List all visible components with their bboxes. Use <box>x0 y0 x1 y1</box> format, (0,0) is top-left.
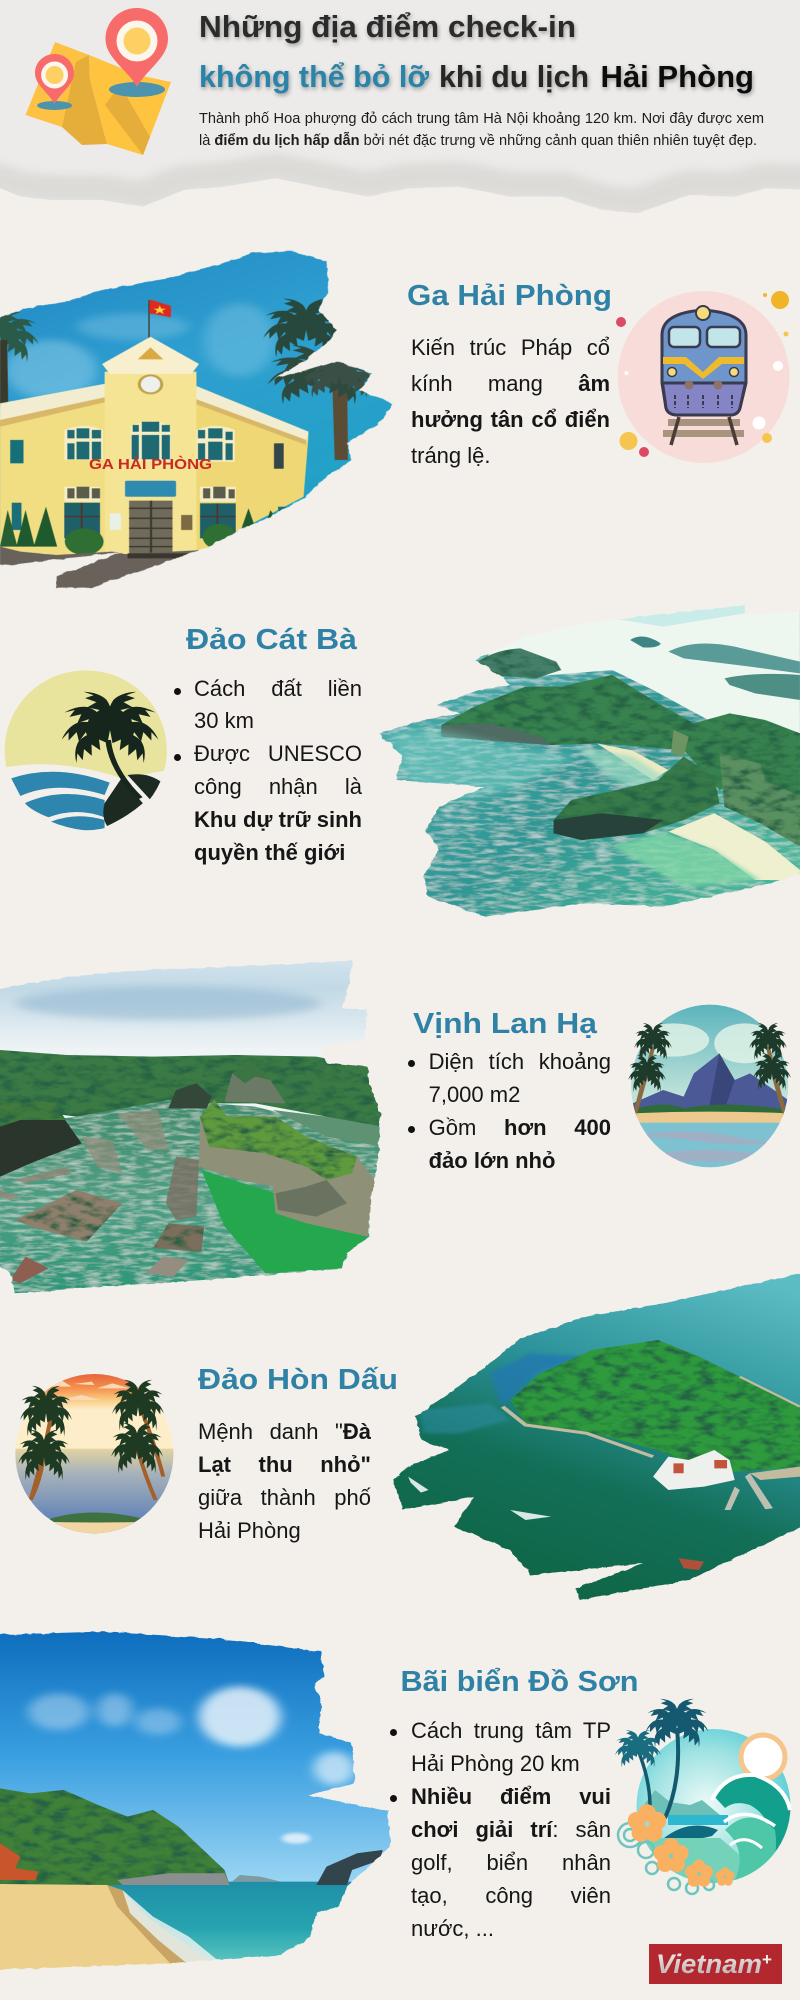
title <box>199 9 754 94</box>
title: Những địa điểm check-in <box>199 9 576 44</box>
text: Đảo Cát Bà bullets: Cách đất liền <box>194 676 362 701</box>
photo: Ga Hải Phòng station <box>0 243 403 593</box>
text: Đảo Cát Bà bullets: Được UNESCO <box>194 741 362 766</box>
heading: Ga Hải Phòng: Ga Hải Phòng <box>407 280 612 312</box>
title: không thể bỏ lỡ <box>199 59 430 94</box>
text: Đảo Hòn Dấu description: Hải Phòng <box>198 1518 301 1543</box>
photo: Đảo Hòn Dấu island <box>383 1267 800 1607</box>
heading: Vịnh Lan Hạ: Vịnh Lan Hạ <box>413 1008 598 1040</box>
text: Bãi biển Đồ Sơn bullets: golf, biển nhân <box>411 1850 611 1875</box>
title: Hải Phòng <box>600 59 754 94</box>
icon: map with location pins <box>26 8 171 155</box>
text: intro paragraph <box>199 111 764 149</box>
photo: Bãi biển Đồ Sơn beach <box>0 1627 403 1977</box>
logo: Vietnam+: Vietnam <box>656 1949 762 1979</box>
station sign: GA HẢI PHÒNG <box>89 455 212 473</box>
icon: palm on island <box>0 670 173 833</box>
text: Ga Hải Phòng description: tráng lệ. <box>411 443 490 468</box>
text: Vịnh Lan Hạ bullets: 7,000 m2 <box>429 1082 520 1107</box>
icon: sunset palms <box>13 1373 176 1535</box>
text: Bãi biển Đồ Sơn bullets: nước, ... <box>411 1916 494 1941</box>
text: Bãi biển Đồ Sơn bullets: Hải Phòng 20 km <box>411 1751 580 1776</box>
text: Đảo Hòn Dấu description: Lạt thu nhỏ" <box>198 1452 371 1477</box>
text: Bãi biển Đồ Sơn bullets: tạo, công viên <box>411 1883 611 1908</box>
text: Ga Hải Phòng description: kính mang âm <box>411 371 610 396</box>
text: Vịnh Lan Hạ bullets: Gồm hơn 400 <box>429 1115 611 1140</box>
heading: Bãi biển Đồ Sơn: Bãi biển Đồ Sơn <box>400 1666 638 1698</box>
icon: train <box>616 291 790 463</box>
logo: Vietnam+: + <box>762 1950 772 1969</box>
photo: Đảo Cát Bà aerial <box>367 597 800 927</box>
text: Bãi biển Đồ Sơn bullets: Cách trung tâm TP <box>411 1718 611 1743</box>
text: Bãi biển Đồ Sơn bullets <box>390 1718 611 1941</box>
text: Vịnh Lan Hạ bullets: Diện tích khoảng <box>429 1049 611 1074</box>
text: Đảo Hòn Dấu description: Mệnh danh "Đà <box>198 1419 371 1444</box>
icon: mountains between palms <box>628 1003 791 1170</box>
text: Ga Hải Phòng description <box>411 335 610 468</box>
heading: Đảo Cát Bà: Đảo Cát Bà <box>186 624 358 656</box>
title: khi du lịch <box>439 59 589 94</box>
text: Đảo Hòn Dấu description <box>198 1419 372 1543</box>
text: intro paragraph: là điểm du lịch hấp dẫn bởi nét đặc trưng về những cảnh quan thiên nhiên tuyệt đẹp. <box>199 133 757 149</box>
text: Ga Hải Phòng description: Kiến trúc Pháp cổ <box>411 335 610 360</box>
logo: Vietnam+ <box>649 1944 782 1984</box>
text: Đảo Cát Bà bullets: 30 km <box>194 708 254 733</box>
text: Vịnh Lan Hạ bullets <box>408 1049 611 1173</box>
text: intro paragraph: Thành phố Hoa phượng đỏ cách trung tâm Hà Nội khoảng 120 km. Nơi đây được xem <box>199 111 764 127</box>
icon: tropical beach with wave and flowers <box>615 1695 792 1894</box>
text: Đảo Cát Bà bullets: quyền thế giới <box>194 840 345 865</box>
photo: Vịnh Lan Hạ bay <box>0 953 393 1300</box>
text: Đảo Cát Bà bullets: công nhận là <box>194 774 362 799</box>
text: Bãi biển Đồ Sơn bullets: chơi giải trí: sân <box>411 1817 611 1842</box>
heading: Đảo Hòn Dấu: Đảo Hòn Dấu <box>198 1364 398 1396</box>
text: Đảo Hòn Dấu description: giữa thành phố <box>198 1485 371 1510</box>
text: Đảo Cát Bà bullets <box>174 676 362 865</box>
header paper background <box>0 149 800 213</box>
text: Đảo Cát Bà bullets: Khu dự trữ sinh <box>194 807 362 832</box>
text: Ga Hải Phòng description: hưởng tân cổ điển <box>411 407 610 432</box>
text: Bãi biển Đồ Sơn bullets: Nhiều điểm vui <box>411 1784 611 1809</box>
text: Vịnh Lan Hạ bullets: đảo lớn nhỏ <box>429 1148 555 1173</box>
